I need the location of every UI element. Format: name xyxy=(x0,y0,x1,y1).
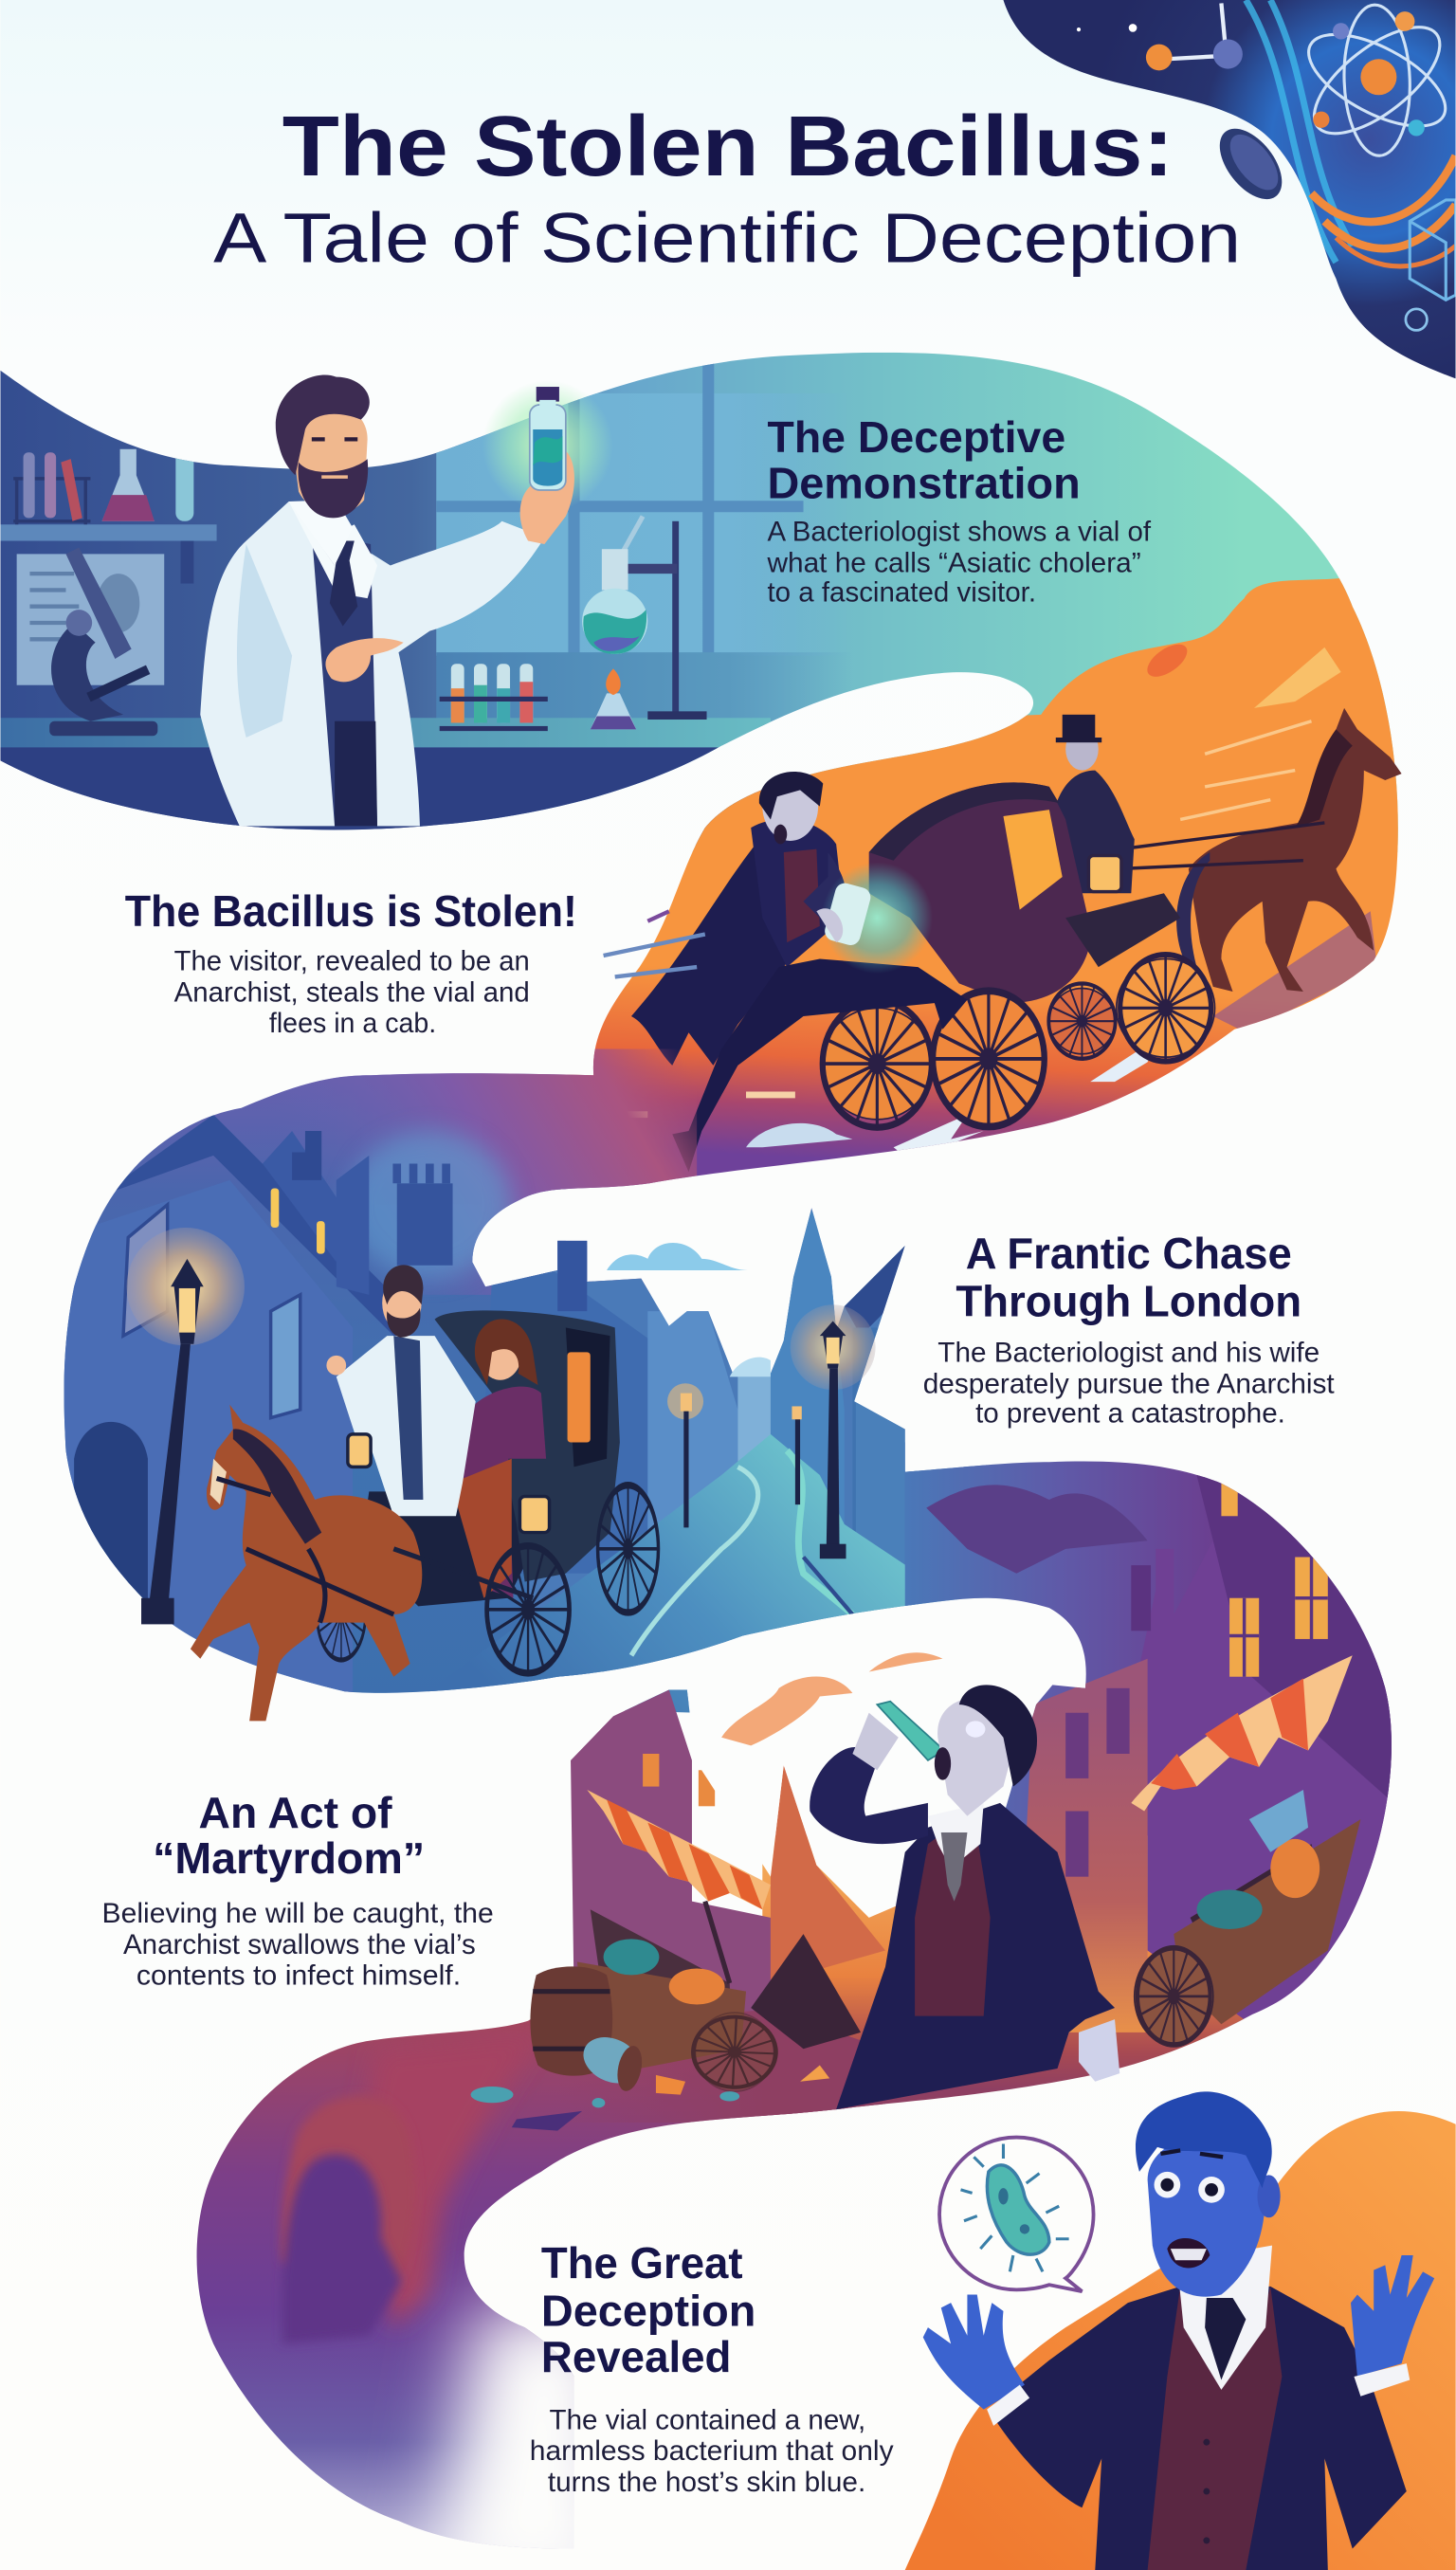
text: martyrdom description: contents to infect himself. xyxy=(136,1960,461,1992)
text: reveal description: The vial contained a new, xyxy=(550,2404,865,2435)
icon: glowing vial xyxy=(530,387,566,490)
heading: the deceptive demonstration: The Deceptive xyxy=(767,412,1065,462)
text: martyrdom description: Anarchist swallows the vial’s xyxy=(123,1929,476,1960)
heading: the deceptive demonstration xyxy=(767,412,1081,508)
icon: wooden barrel xyxy=(530,1966,612,2076)
market ground xyxy=(633,2011,885,2123)
icon: clouds xyxy=(607,1243,771,1376)
heading: an act of martyrdom: An Act of xyxy=(199,1788,392,1837)
title: A Tale of Scientific Deception xyxy=(213,199,1241,278)
icon: street lamps xyxy=(126,1228,876,1624)
heading: an act of martyrdom xyxy=(153,1788,425,1883)
icon: broken wheel xyxy=(680,2005,790,2099)
text: theft description: Anarchist, steals the vial and xyxy=(174,976,530,1008)
title xyxy=(213,100,1241,278)
text: chase description xyxy=(923,1338,1335,1430)
figure: fleeing anarchist xyxy=(631,772,967,1172)
heading: a frantic chase through London: Through London xyxy=(956,1276,1301,1325)
panel: lab scene xyxy=(0,328,1456,852)
heading: the bacillus is stolen: The Bacillus is Stolen! xyxy=(125,886,577,936)
icon: test tubes xyxy=(440,664,548,731)
text: chase description: to prevent a catastrophe. xyxy=(975,1398,1285,1430)
text: theft description: flees in a cab. xyxy=(269,1008,436,1039)
figure: bacteriologist riding xyxy=(337,1336,476,1516)
road xyxy=(428,1434,957,1712)
icon: horse xyxy=(1176,708,1402,992)
figure: blue-skinned man xyxy=(923,2091,1434,2570)
houses centre xyxy=(491,1270,647,1574)
heading: the great deception revealed: Revealed xyxy=(541,2332,731,2381)
icon: driver xyxy=(1049,715,1135,893)
stones xyxy=(471,2087,514,2103)
decorative science corner: atom and molecules xyxy=(984,0,1456,393)
icon: lens xyxy=(1208,118,1294,210)
icon: flask on stand xyxy=(582,517,707,720)
text: demonstration description: what he calls “Asiatic cholera” xyxy=(766,547,1141,578)
heading: the deceptive demonstration: Demonstration xyxy=(767,459,1081,508)
text: martyrdom description xyxy=(102,1898,494,1992)
heading: a frantic chase through London: A Frantic Chase xyxy=(966,1229,1292,1278)
icon: microscope xyxy=(49,547,157,736)
heading: a frantic chase through London xyxy=(956,1229,1301,1325)
text: theft description: The visitor, revealed to be an xyxy=(174,946,530,977)
figure: anarchist drinking the vial xyxy=(810,1685,1119,2109)
icon: carriage wheels xyxy=(822,955,1214,1128)
icon: speed lines xyxy=(604,911,705,976)
text: chase description: The Bacteriologist and his wife xyxy=(937,1338,1320,1369)
buildings left xyxy=(64,1225,353,1692)
icon: horse xyxy=(191,1405,422,1721)
panel: fading purple ribbon xyxy=(164,2016,852,2570)
icon: toppled cup xyxy=(576,2029,647,2092)
icon: smoke xyxy=(721,1652,942,1745)
text: theft description xyxy=(174,946,530,1039)
text: demonstration description: to a fascinated visitor. xyxy=(767,577,1036,609)
heading: an act of martyrdom: “Martyrdom” xyxy=(153,1833,425,1883)
panel: escape scene xyxy=(559,578,1398,1213)
title: The Stolen Bacillus: xyxy=(282,100,1174,194)
icon: left market stall with awning xyxy=(471,1790,861,2131)
icon: carriage wheels xyxy=(317,1434,659,1673)
icon: carriage xyxy=(869,782,1180,1003)
icon: right market cart with awning xyxy=(1131,1655,1360,2046)
heading: the great deception revealed: The Great xyxy=(541,2238,743,2287)
panel: orange backdrop xyxy=(905,2111,1456,2570)
text: chase description: desperately pursue the Anarchist xyxy=(923,1369,1335,1400)
panel: market square scene xyxy=(557,1442,1456,2123)
figure: horse and carriage in flight xyxy=(631,708,1402,1172)
text: reveal description: turns the host’s skin blue. xyxy=(548,2467,865,2498)
figure: bacteriologist with vial xyxy=(200,375,613,826)
text: demonstration description: A Bacteriologist shows a vial of xyxy=(767,517,1152,548)
panel: London chase scene xyxy=(0,1049,987,1721)
text: martyrdom description: Believing he will be caught, the xyxy=(102,1898,494,1929)
heading: the great deception revealed: Deception xyxy=(541,2286,755,2335)
text: reveal description: harmless bacterium that only xyxy=(530,2435,894,2467)
text: demonstration description xyxy=(766,517,1152,609)
text: reveal description xyxy=(530,2404,894,2498)
icon: right blue hand xyxy=(1351,2255,1434,2377)
icon: burner flask xyxy=(591,668,636,729)
figure: woman xyxy=(459,1387,546,1598)
figure: chase carriage with bacteriologist, wife and horse xyxy=(191,1265,659,1721)
icon: speech bubble with bacterium xyxy=(939,2138,1094,2291)
heading: the great deception revealed xyxy=(541,2238,755,2381)
icon: left blue hand xyxy=(923,2295,1025,2410)
icon: green vial xyxy=(877,1702,944,1760)
